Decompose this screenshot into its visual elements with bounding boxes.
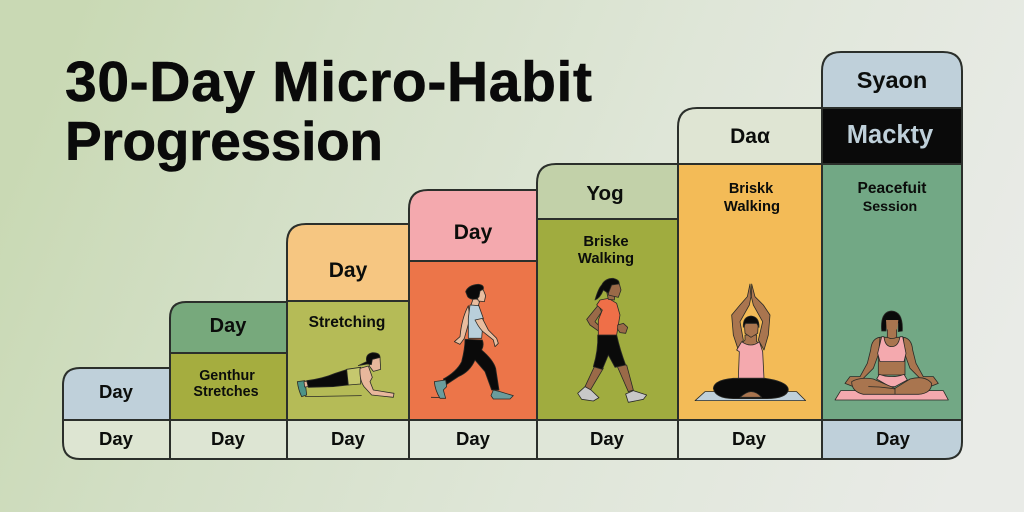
column 3 header: Day — [329, 259, 368, 282]
column 6 header — [678, 108, 822, 164]
title: Progression — [65, 110, 383, 172]
column 5 header — [537, 164, 678, 219]
column 3 header — [287, 224, 409, 301]
column 2: Genthur Stretches — [170, 302, 287, 420]
column 7 black band — [822, 108, 962, 164]
column 4 header — [409, 190, 537, 261]
column 5 body: Walking — [578, 251, 634, 267]
icon: walking person in blue shirt — [431, 284, 513, 399]
column 6 body: Walking — [724, 199, 780, 215]
column 2 body: Genthur — [199, 368, 255, 384]
column 1: day label: Day — [99, 381, 134, 402]
bottom row of day labels — [63, 420, 962, 459]
icon: seated yoga pose with arms raised — [695, 284, 806, 401]
column 5 header: Yog — [586, 182, 624, 205]
day label 6 — [678, 420, 822, 459]
icon: walking woman in orange shirt — [578, 278, 647, 402]
title — [65, 50, 592, 172]
day label 4: Day — [456, 428, 491, 449]
column 6: brisk walking — [678, 108, 822, 420]
column 7 black band: Mackty — [847, 121, 934, 149]
column 6 header: Daα — [730, 125, 770, 148]
icon: meditating woman on mat — [835, 311, 948, 400]
day label 5: Day — [590, 428, 625, 449]
day label 1: Day — [99, 428, 134, 449]
day label 4 — [409, 420, 537, 459]
day label 1 — [63, 420, 170, 459]
column 4 header: Day — [454, 221, 493, 244]
column 7 body — [822, 164, 962, 420]
day label 5 — [537, 420, 678, 459]
column 5: brisk walking — [537, 164, 678, 420]
column 2 body: Stretches — [193, 384, 259, 400]
column 3 text: Stretching — [309, 314, 385, 331]
column 6 body: Briskk — [729, 181, 774, 197]
column 1: day label — [63, 368, 170, 420]
column 7 body: Session — [863, 199, 917, 215]
column 7 body: Peacefuit — [858, 180, 926, 197]
day label 2: Day — [211, 428, 246, 449]
column 7 top header — [822, 52, 962, 108]
column 5 body: Briske — [583, 234, 629, 250]
day label 7: Day — [876, 428, 911, 449]
day label 6: Day — [732, 428, 767, 449]
day label 3: Day — [331, 428, 366, 449]
title: 30-Day Micro-Habit — [65, 50, 592, 114]
column 3 body — [287, 301, 409, 420]
column 4: walking — [409, 190, 537, 420]
icon: person in plank pose — [297, 353, 394, 397]
column 5 body — [537, 219, 678, 420]
column 3: Stretching — [287, 224, 409, 420]
column 6 body — [678, 164, 822, 420]
column 7: peaceful session — [822, 52, 962, 420]
day label 7 — [822, 420, 962, 459]
column 2 header: Day — [210, 315, 247, 337]
column 4 body — [409, 261, 537, 420]
column 7 top header: Syaon — [857, 67, 927, 93]
column 2 body — [170, 353, 287, 420]
day label 2 — [170, 420, 287, 459]
day label 3 — [287, 420, 409, 459]
